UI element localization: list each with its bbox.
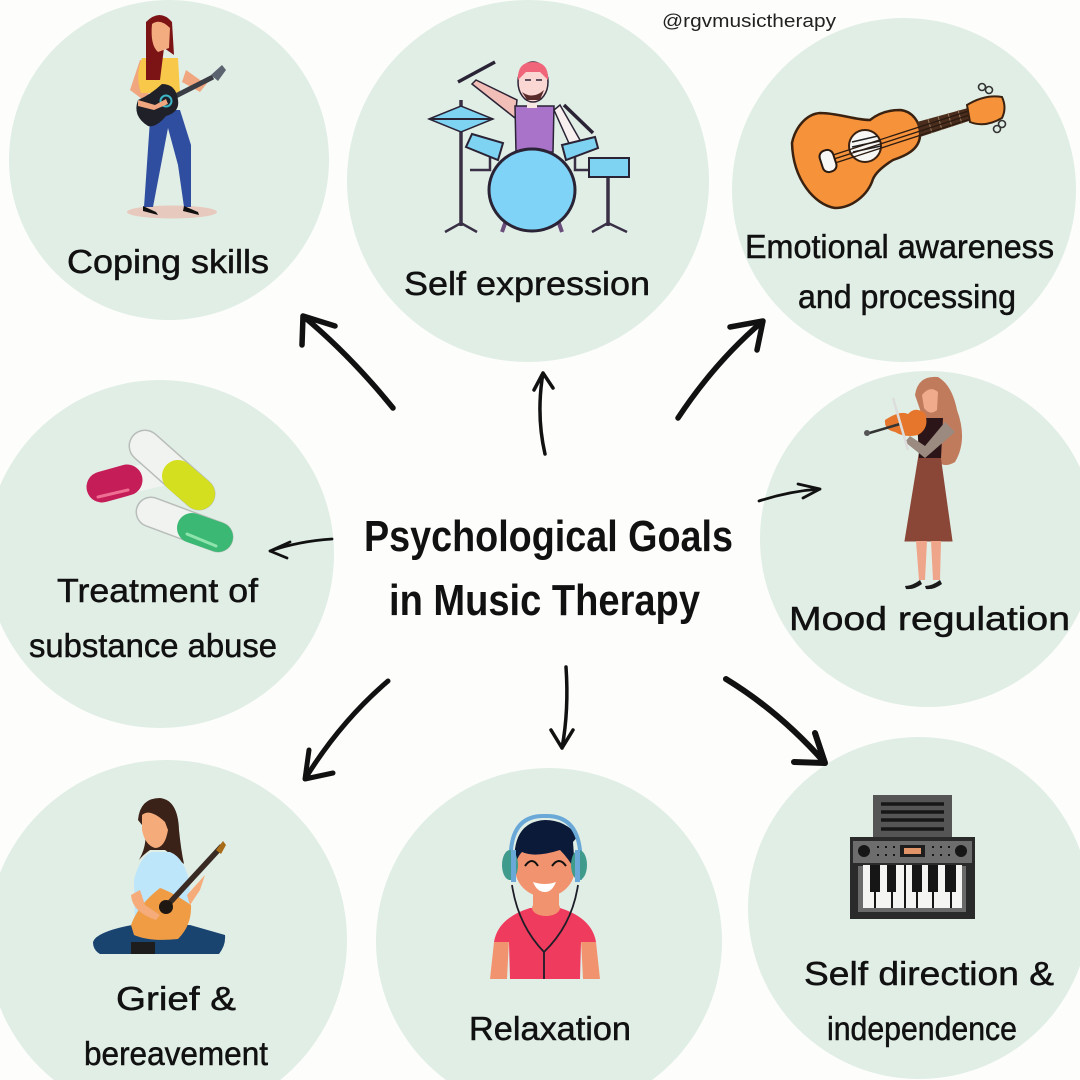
arrow: to self expression bbox=[534, 373, 553, 454]
arrow: to treatment of substance abuse bbox=[270, 539, 332, 558]
panel: relaxation bbox=[376, 768, 722, 1080]
panel: coping skills bbox=[9, 0, 329, 320]
arrow: to emotional awareness bbox=[678, 321, 763, 418]
arrow: to mood regulation bbox=[759, 484, 820, 501]
icon: drummer bbox=[429, 62, 629, 232]
arrow: to relaxation bbox=[551, 667, 573, 748]
icon: capsules bbox=[98, 446, 218, 546]
title bbox=[364, 512, 733, 625]
label: independence: independence bbox=[827, 1010, 1017, 1047]
icon: seated girl with guitar bbox=[93, 798, 226, 954]
icon: ukulele bbox=[792, 84, 1006, 208]
panel: grief and bereavement bbox=[0, 760, 347, 1080]
label: emotional awareness: Emotional awareness bbox=[745, 228, 1054, 265]
panel: mood regulation bbox=[760, 371, 1080, 707]
arrow: to self direction bbox=[726, 679, 825, 763]
label: mood regulation: Mood regulation bbox=[789, 600, 1070, 637]
arrow: to grief and bereavement bbox=[305, 681, 388, 779]
icon: electronic keyboard bbox=[850, 795, 975, 919]
title: Psychological Goals bbox=[364, 512, 733, 561]
label: grief and: Grief & bbox=[116, 980, 236, 1017]
panel: self direction and independence bbox=[748, 737, 1080, 1079]
arrow: to coping skills bbox=[302, 316, 393, 408]
panel: self expression bbox=[347, 0, 709, 362]
label: bereavement: bereavement bbox=[84, 1035, 268, 1072]
label: coping skills: Coping skills bbox=[67, 243, 269, 280]
label: relaxation: Relaxation bbox=[469, 1010, 631, 1047]
title: in Music Therapy bbox=[389, 576, 700, 625]
icon: boy with headphones bbox=[490, 816, 600, 979]
handle: @rgvmusictherapy bbox=[662, 11, 836, 31]
label: treatment of: Treatment of bbox=[57, 572, 259, 609]
icon: violinist bbox=[864, 377, 962, 589]
label: self expression: Self expression bbox=[404, 265, 650, 302]
icon: woman playing guitar bbox=[127, 15, 226, 218]
panel: treatment of substance abuse bbox=[0, 380, 334, 728]
label: and processing: and processing bbox=[798, 278, 1016, 315]
label: self direction: Self direction & bbox=[804, 955, 1054, 992]
label: substance abuse: substance abuse bbox=[29, 627, 277, 664]
panel: emotional awareness and processing bbox=[732, 18, 1076, 362]
